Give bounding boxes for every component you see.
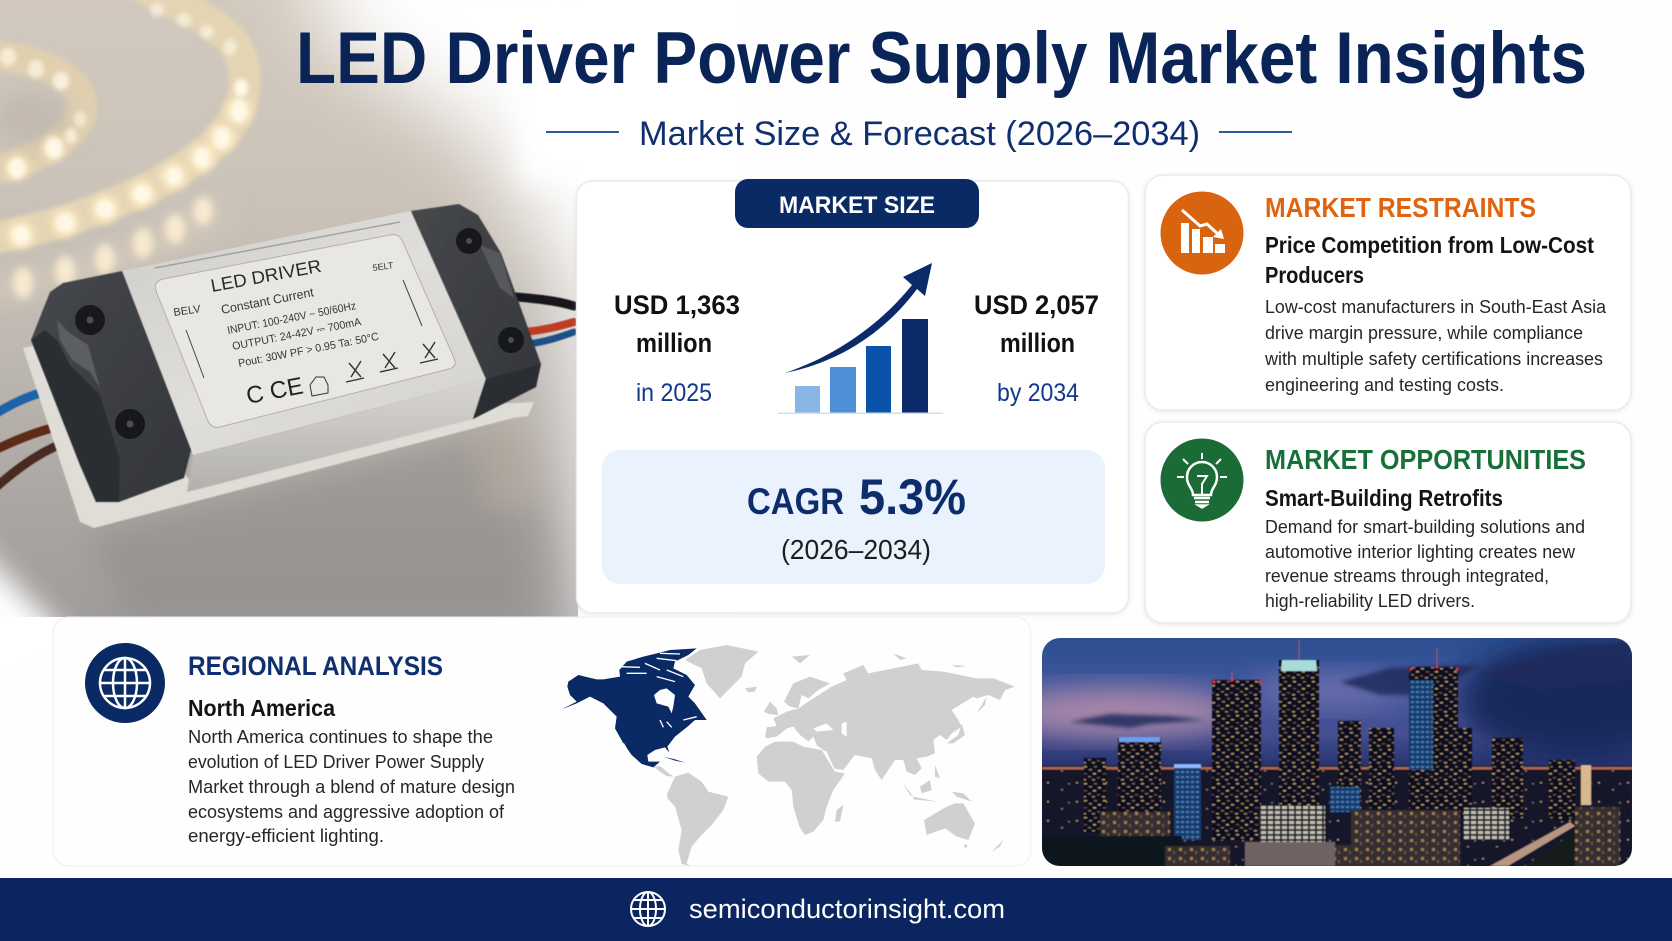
- label text: INPUT: 100-240V ~ 50/60Hz: [226, 300, 357, 337]
- North America highlighted: [562, 648, 707, 767]
- regional body: North America continues to shape the: [188, 727, 493, 747]
- opportunities body: [1265, 517, 1585, 611]
- panel: market restraints: [1145, 175, 1631, 410]
- value 2034: [974, 290, 1099, 407]
- icon: falling bar chart: [1160, 192, 1244, 274]
- regional heading: REGIONAL ANALYSIS: [188, 651, 443, 681]
- left end cap: [31, 271, 191, 502]
- label text: [173, 256, 438, 410]
- region name: North America: [188, 695, 335, 721]
- regional body: Market through a blend of mature design: [188, 777, 515, 797]
- value 2025: USD 1,363: [614, 290, 740, 320]
- fade to white: [300, 0, 740, 660]
- bar chart with growth arrow: [778, 263, 943, 414]
- value 2025: in 2025: [636, 379, 712, 407]
- top face: [122, 211, 486, 455]
- label text: BELV: [173, 303, 202, 319]
- LED strip bands: [0, 0, 245, 290]
- value 2034: million: [1000, 328, 1075, 358]
- label text: C CE: [244, 372, 305, 410]
- CAGR box: (2026–2034): [781, 534, 931, 565]
- label text: 5ELT: [372, 260, 394, 273]
- regional body: [188, 727, 515, 846]
- icon: footer globe: [631, 892, 665, 926]
- restraints body: drive margin pressure, while compliance: [1265, 323, 1583, 343]
- label: [155, 235, 455, 427]
- opportunities subheading: Smart-Building Retrofits: [1265, 485, 1503, 511]
- market size pill: MARKET SIZE: [779, 192, 935, 219]
- opportunities body: Demand for smart-building solutions and: [1265, 517, 1585, 537]
- regional body: evolution of LED Driver Power Supply: [188, 752, 484, 772]
- panel: market opportunities: [1145, 422, 1631, 623]
- opportunities body: revenue streams through integrated,: [1265, 566, 1549, 586]
- icon: globe: [85, 643, 165, 723]
- right end cap: [411, 204, 541, 419]
- restraints subheading: Producers: [1265, 262, 1364, 288]
- opportunities heading: MARKET OPPORTUNITIES: [1265, 444, 1586, 475]
- screw holes: [75, 228, 524, 439]
- value 2034: USD 2,057: [974, 290, 1099, 320]
- value 2034: by 2034: [997, 379, 1079, 407]
- LED dots core: [0, 3, 248, 244]
- seas cut-outs: [813, 722, 847, 770]
- LED dots glow: [5, 97, 253, 249]
- market size pill: [735, 179, 979, 228]
- regional body: energy-efficient lighting.: [188, 826, 384, 846]
- panel: market size: [576, 179, 1128, 613]
- opportunities body: high-reliability LED drivers.: [1265, 591, 1475, 611]
- restraints subheading: [1265, 232, 1594, 288]
- footer bar: [0, 878, 1672, 941]
- restraints body: engineering and testing costs.: [1265, 375, 1504, 395]
- website: semiconductorinsight.com: [689, 894, 1005, 924]
- subtitle with side rules: Market Size & Forecast (2026–2034): [639, 115, 1200, 153]
- side: [187, 379, 486, 492]
- restraints body: with multiple safety certifications increases: [1264, 349, 1603, 369]
- photo: city skyline at dusk: [1042, 638, 1632, 866]
- value 2025: million: [636, 328, 712, 358]
- icon: light bulb: [1160, 438, 1244, 522]
- label text: Pout: 30W PF > 0.95 Ta: 50°C: [237, 331, 380, 370]
- panel: regional analysis: [53, 617, 1031, 866]
- opportunities body: automotive interior lighting creates new: [1265, 542, 1576, 562]
- restraints body: Low-cost manufacturers in South-East Asia: [1265, 297, 1607, 317]
- world map: [562, 645, 1015, 866]
- photo: LED driver module and LED strip: [0, 0, 740, 700]
- wires: [0, 296, 574, 488]
- LED reflections: [13, 197, 213, 299]
- restraints body: [1264, 297, 1607, 395]
- CAGR box: CAGR: [747, 481, 844, 522]
- label text: OUTPUT: 24-42V ⎓ 700mA: [231, 316, 363, 353]
- table reflection: [90, 425, 570, 620]
- label text: LED DRIVER: [209, 256, 323, 296]
- restraints subheading: Price Competition from Low-Cost: [1265, 232, 1594, 258]
- CAGR box: [602, 450, 1105, 584]
- value 2025: [614, 290, 740, 407]
- regional body: ecosystems and aggressive adoption of: [188, 802, 505, 822]
- CAGR box: 5.3%: [859, 469, 966, 525]
- base plate: [23, 340, 534, 528]
- label text: Constant Current: [220, 285, 315, 317]
- restraints heading: MARKET RESTRAINTS: [1265, 192, 1536, 223]
